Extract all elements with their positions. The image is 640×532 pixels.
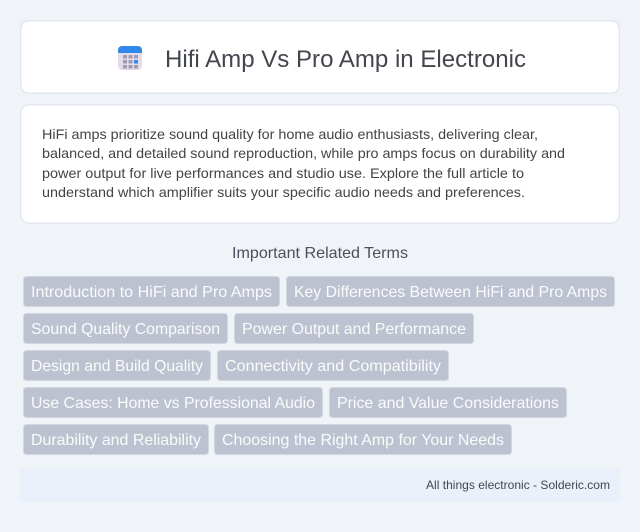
tag: durability [24, 424, 208, 454]
panel: header [21, 21, 619, 93]
tag: choosing: Choosing the Right Amp for Your Needs [222, 432, 504, 449]
tag: introduction [24, 276, 280, 306]
title: Hifi Amp Vs Pro Amp in Electronic [165, 46, 526, 73]
text block: description: understand which amplifier suits your specific audio needs and preferences. [42, 184, 525, 200]
tag: use cases [24, 388, 322, 418]
footer: All things electronic - Solderic.com [426, 478, 610, 492]
tag: sound quality [24, 314, 228, 344]
panel: description [21, 105, 619, 223]
tag: design [24, 350, 210, 380]
tag: choosing [214, 424, 512, 454]
text block: description: balanced, and detailed sound reproduction, while pro amps focus on durability and [42, 145, 565, 161]
text block: description: HiFi amps prioritize sound quality for home audio enthusiasts, delivering clear, [42, 126, 538, 142]
panel: term tags [24, 276, 614, 454]
tag: power output [234, 314, 474, 344]
tag: key differences: Key Differences Between HiFi and Pro Amps [294, 284, 607, 301]
tag: introduction: Introduction to HiFi and Pro Amps [31, 284, 272, 301]
tag: price: Price and Value Considerations [337, 395, 559, 412]
tag: connectivity [218, 350, 448, 380]
footer [20, 468, 620, 502]
tag: sound quality: Sound Quality Comparison [31, 321, 220, 338]
tag: design: Design and Build Quality [31, 358, 203, 375]
heading: important related terms: Important Related Terms [232, 245, 408, 262]
tag: key differences [286, 276, 614, 306]
tag: durability: Durability and Reliability [31, 432, 201, 449]
tag: power output: Power Output and Performance [242, 321, 466, 338]
tag: price [330, 388, 566, 418]
tag: connectivity: Connectivity and Compatibility [225, 358, 441, 375]
text block: description [42, 126, 565, 200]
text block: description: power output for live performances and studio use. Explore the full article to [42, 165, 524, 181]
icon: calendar [118, 46, 142, 70]
tag: use cases: Use Cases: Home vs Professional Audio [31, 395, 315, 412]
